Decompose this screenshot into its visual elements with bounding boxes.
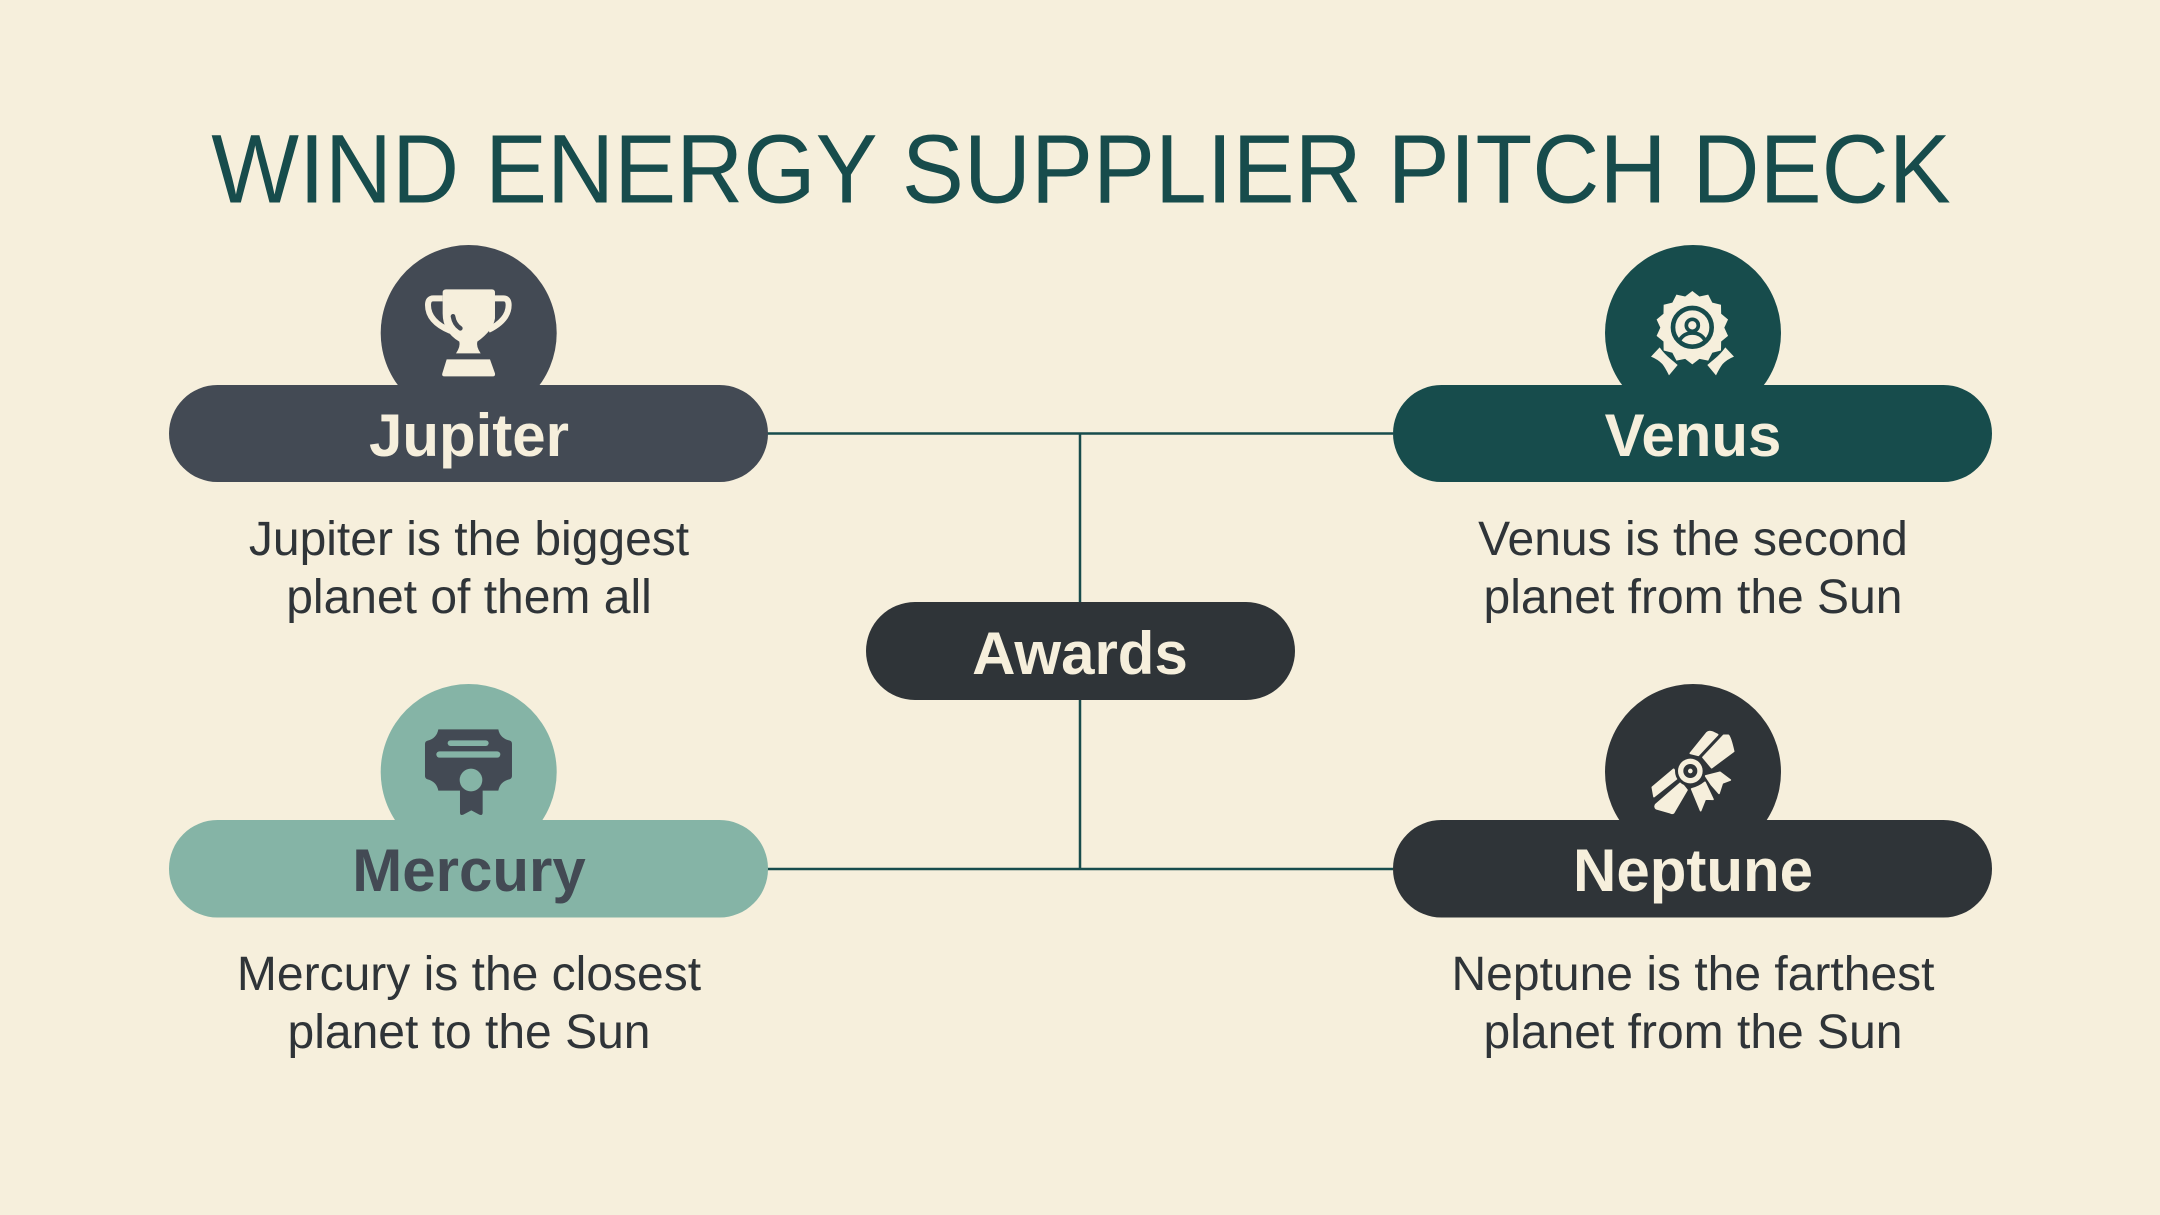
description: Jupiter: Jupiter is the biggest [249, 513, 689, 566]
description: Neptune: planet from the Sun [1484, 1006, 1902, 1059]
description: Venus: Venus is the second [1478, 513, 1908, 566]
panel: Venus [1393, 245, 1992, 624]
description: Neptune: Neptune is the farthest [1452, 948, 1934, 1001]
icon: diploma scroll [1652, 732, 1734, 813]
panel: Mercury: Mercury [352, 837, 586, 904]
description: Jupiter: planet of them all [286, 571, 652, 624]
panel: Neptune [1393, 684, 1992, 1059]
panel: Jupiter [169, 245, 768, 624]
panel: Neptune: Neptune [1573, 837, 1813, 904]
panel: Mercury [169, 684, 768, 1059]
icon: rosette badge [1651, 291, 1734, 375]
panel: Venus: Venus [1605, 402, 1781, 469]
icon: trophy [428, 289, 509, 376]
connector lines [767, 434, 1393, 869]
center node: Awards: Awards [972, 620, 1188, 687]
description: Mercury: Mercury is the closest [237, 948, 701, 1001]
center node: Awards [866, 602, 1295, 700]
icon: certificate [425, 729, 512, 815]
description: Venus: planet from the Sun [1484, 571, 1902, 624]
title: WIND ENERGY SUPPLIER PITCH DECK [211, 115, 1951, 224]
description: Mercury: planet to the Sun [288, 1006, 650, 1059]
panel: Jupiter: Jupiter [369, 402, 569, 469]
